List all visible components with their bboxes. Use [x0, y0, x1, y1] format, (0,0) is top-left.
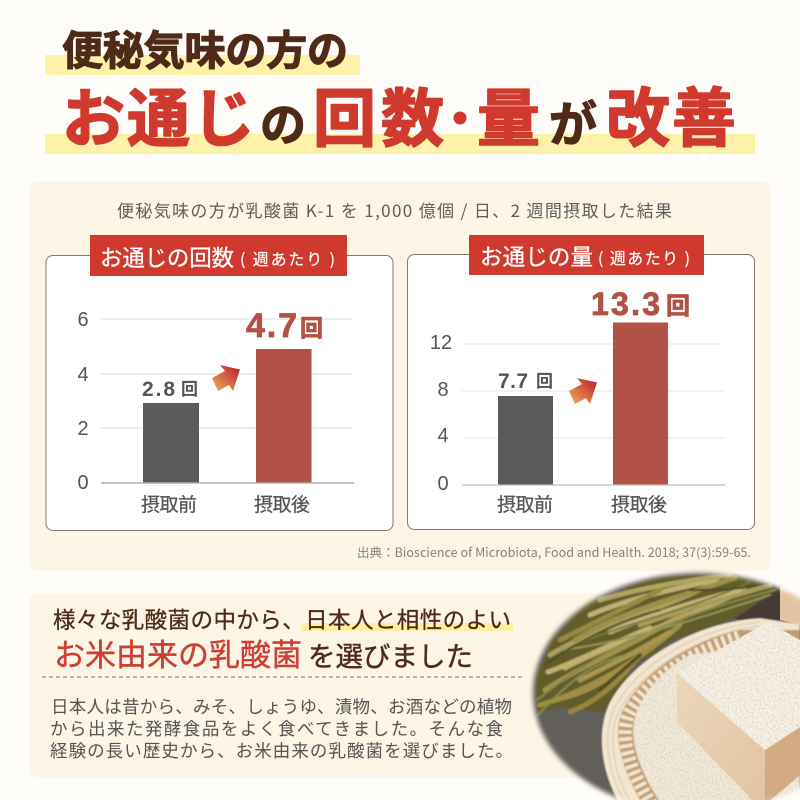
title line 1: 便秘気味の方の: [62, 17, 348, 77]
value: before: [498, 367, 553, 393]
title line 2: [62, 68, 736, 160]
rice stalks: [535, 572, 777, 715]
panel: bowel movement frequency chart: [46, 235, 393, 530]
bar: after: [613, 322, 668, 485]
bar: before: [498, 396, 553, 485]
dashed divider: [42, 676, 523, 678]
x axis labels: [497, 494, 667, 516]
y axis labels: 12: [430, 332, 452, 354]
title line 2: 改善: [606, 68, 736, 160]
x axis labels: 摂取後: [254, 494, 310, 516]
loose rice: [634, 652, 800, 800]
value: after: [591, 286, 690, 322]
value: after: [246, 307, 323, 345]
title line 2: 量: [477, 69, 540, 160]
title line 2: 回数: [313, 69, 444, 160]
grid lines: [101, 319, 353, 428]
bar: after: [256, 349, 312, 483]
panel: study results: [29, 181, 771, 571]
x axis labels: 摂取前: [497, 494, 553, 516]
heading: amount: ( 週あたり ): [598, 245, 690, 269]
wooden box in the back: [780, 586, 800, 625]
study description: 便秘気味の方が乳酸菌 K-1 を 1,000 億個 / 日、2 週間摂取した結果: [117, 197, 672, 222]
title line 2: お通じ: [62, 69, 255, 160]
heading: amount: [469, 235, 704, 275]
icon: arrow: [569, 378, 597, 404]
heading: frequency: [90, 235, 347, 276]
bar: before: [143, 403, 199, 483]
masu rice: [677, 622, 800, 750]
x axis labels: 摂取後: [611, 494, 667, 516]
masu side left: [677, 673, 765, 800]
value: after: 13.3: [591, 286, 660, 322]
icon: arrow: [212, 365, 240, 391]
x axis labels: [141, 494, 310, 516]
title: [45, 17, 755, 160]
title line 2: が: [549, 85, 597, 155]
x axis labels: 摂取前: [141, 494, 197, 516]
y axis labels: [430, 332, 452, 495]
value: before: [142, 375, 198, 401]
value: before: 回: [536, 367, 553, 392]
y axis labels: 8: [437, 379, 449, 401]
heading: frequency: ( 週あたり ): [240, 246, 335, 270]
panel: bowel movement amount chart: [408, 235, 754, 530]
heading highlight: [301, 623, 513, 631]
value: after: 回: [300, 309, 323, 343]
baseline: [462, 484, 725, 486]
heading line 2: お米由来の乳酸菌: [54, 630, 302, 675]
title line 1 highlight: [45, 55, 360, 75]
value: after: 4.7: [246, 307, 297, 345]
y axis labels: 4: [77, 364, 89, 386]
heading line 1: 様々な乳酸菌の中から、日本人と相性のよい: [53, 603, 511, 635]
value: before: 7.7: [498, 370, 528, 393]
y axis labels: 0: [437, 473, 449, 495]
bamboo basket: [602, 618, 800, 800]
heading: frequency: お通じの回数: [100, 241, 234, 273]
photo: rice ears, bamboo basket and wooden masu: [525, 565, 800, 800]
table background: [525, 565, 800, 800]
y axis labels: [77, 309, 89, 494]
title line 2 highlight: [45, 134, 755, 154]
masu side right: [765, 727, 800, 800]
body text: から出来た発酵食品をよく食べてきました。そんな食: [50, 719, 503, 739]
value: before: 2.8: [142, 378, 175, 401]
heading line 2: [54, 630, 473, 675]
grid lines: [462, 344, 724, 438]
y axis labels: 0: [77, 472, 89, 494]
value: before: 回: [181, 375, 198, 400]
title line 2: の: [260, 89, 306, 155]
baseline: [101, 482, 354, 484]
heading line 2: を選びました: [308, 634, 473, 674]
y axis labels: 2: [77, 418, 89, 440]
y axis labels: 4: [437, 425, 449, 447]
heading: amount: お通じの量: [480, 240, 593, 272]
y axis labels: 6: [77, 309, 89, 331]
source citation: 出典：Bioscience of Microbiota, Food and Health. 2018; 37(3):59-65.: [357, 542, 751, 561]
value: after: 回: [666, 286, 690, 321]
body text: [50, 697, 513, 761]
body text: 経験の長い歴史から、お米由来の乳酸菌を選びました。: [50, 741, 513, 761]
body text: 日本人は昔から、みそ、しょうゆ、漬物、お酒などの植物: [51, 697, 512, 717]
panel: rice-derived lactic acid bacteria: [29, 593, 800, 778]
